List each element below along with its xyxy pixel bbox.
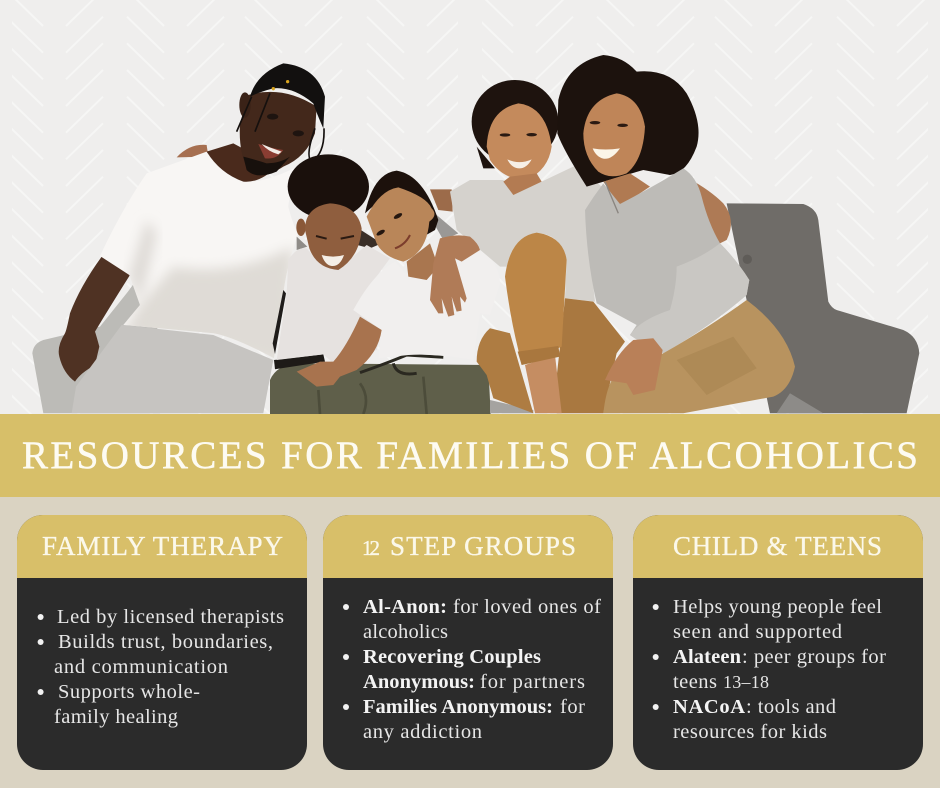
list: child and teens: Alateen	[673, 646, 742, 668]
boy's hand on his shoulder	[430, 235, 480, 317]
list: 12 step groups: for loved ones of	[453, 596, 601, 618]
list: family therapy: Builds trust, boundaries,	[58, 631, 273, 653]
panel: 12 step groups	[323, 515, 613, 770]
family photo on sofa	[32, 55, 919, 414]
list: child and teens: seen and supported	[673, 621, 842, 643]
list: child and teens: resources for kids	[673, 721, 827, 743]
panel: child and teens	[633, 515, 923, 770]
list: child and teens	[653, 596, 886, 743]
list: 12 step groups: any addiction	[363, 721, 482, 743]
list: family therapy: and communication	[54, 656, 228, 678]
list: child and teens: 13–18	[723, 672, 769, 692]
list: 12 step groups: Recovering Couples	[363, 646, 541, 668]
list: 12 step groups: Families Anonymous:	[363, 696, 553, 718]
list: family therapy: family healing	[54, 706, 178, 728]
father	[59, 63, 325, 413]
list: child and teens: teens	[673, 671, 717, 693]
list: child and teens: Helps young people feel	[673, 596, 882, 618]
photo background with chevron pattern	[0, 0, 940, 426]
list: child and teens: : tools and	[746, 696, 836, 718]
list: family therapy: Supports whole-	[58, 681, 200, 703]
list: 12 step groups: Anonymous:	[363, 671, 475, 693]
heading: 12 step groups: STEP GROUPS	[390, 531, 576, 561]
two boys	[270, 154, 500, 414]
list: child and teens: : peer groups for	[742, 646, 886, 668]
heading: 12 step groups: 12	[362, 536, 380, 560]
older boy	[273, 290, 286, 354]
panel: family therapy	[17, 515, 307, 770]
daughter	[450, 80, 625, 413]
list: 12 step groups: alcoholics	[363, 621, 448, 643]
mother	[557, 55, 823, 413]
footer background	[0, 497, 940, 788]
list: family therapy	[38, 606, 284, 728]
title: RESOURCES FOR FAMILIES OF ALCOHOLICS	[22, 434, 918, 477]
list: 12 step groups: for partners	[480, 671, 585, 693]
sofa left side	[32, 255, 160, 413]
list: child and teens: NACoA	[673, 696, 745, 718]
list: family therapy: Led by licensed therapists	[57, 606, 284, 628]
sofa right side	[727, 203, 919, 413]
heading: child and teens: CHILD & TEENS	[673, 531, 882, 561]
heading: family therapy: FAMILY THERAPY	[42, 531, 283, 561]
list: 12 step groups: for	[560, 696, 585, 718]
title banner	[0, 414, 940, 497]
younger boy	[353, 250, 500, 360]
list: 12 step groups	[343, 596, 601, 743]
list: 12 step groups: Al-Anon:	[363, 596, 447, 618]
